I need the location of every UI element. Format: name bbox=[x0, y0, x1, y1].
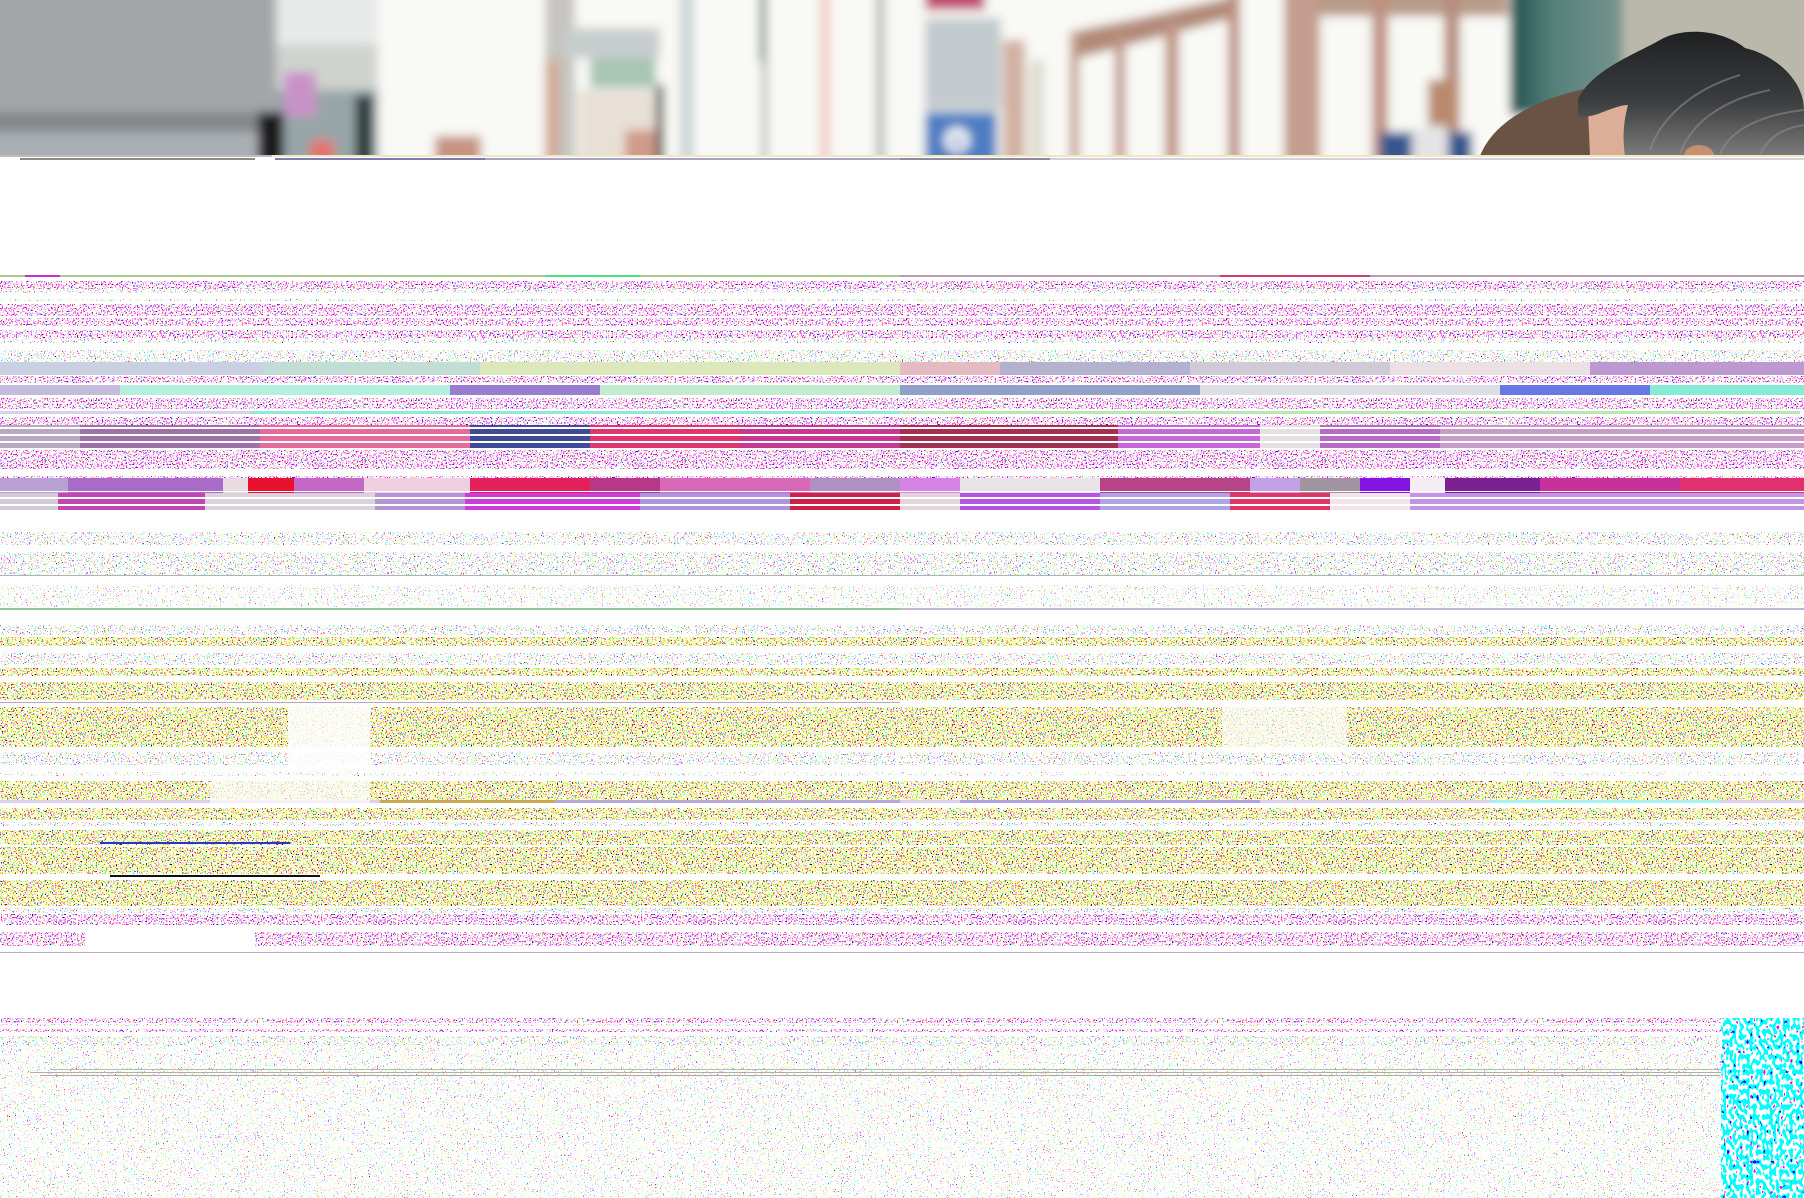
tan and lilac seam bbox=[100, 800, 1720, 877]
man in front: ear bbox=[1684, 145, 1714, 155]
cyan corruption column bbox=[1721, 1018, 1804, 1198]
top bottom-rows noise bbox=[0, 1018, 1804, 1198]
photo background: blurred buildings and signs bbox=[0, 0, 1804, 155]
corrupted edge line under photo bbox=[0, 155, 1804, 160]
man in front: face and ear bbox=[1588, 105, 1628, 155]
yellow dense noise rows bbox=[0, 637, 1804, 913]
corrupted section: sparse bottom noise bbox=[0, 1018, 1804, 1198]
corrupted section: body text rows as coloured noise bbox=[0, 532, 1804, 953]
blank gap inside right noise bbox=[1222, 705, 1347, 753]
man in back: brown hair bbox=[1480, 89, 1590, 155]
man in front: grey-streaked dark hair bbox=[1578, 32, 1804, 156]
wide gap at mid band bbox=[210, 781, 370, 803]
left gap in lower purple rows bbox=[85, 930, 255, 948]
coloured seam bbox=[0, 275, 1804, 277]
noise rows bbox=[0, 281, 1804, 469]
pastel band 3 bbox=[0, 411, 1800, 414]
photo banner: blurred street with two men bbox=[0, 0, 1804, 155]
saturated purple, red and magenta block bbox=[0, 476, 1804, 510]
pastel band 2 bbox=[0, 385, 1804, 395]
striped purple, pink and navy band bbox=[0, 425, 1804, 448]
light noise rows bbox=[0, 532, 1804, 635]
purple dense noise rows bbox=[0, 914, 1804, 953]
pastel band 1 bbox=[0, 362, 1804, 375]
blank gap inside left noise bbox=[288, 705, 370, 767]
thin coloured lines bbox=[30, 1069, 1750, 1076]
corrupted section: upper glitch rows bbox=[0, 275, 1804, 510]
